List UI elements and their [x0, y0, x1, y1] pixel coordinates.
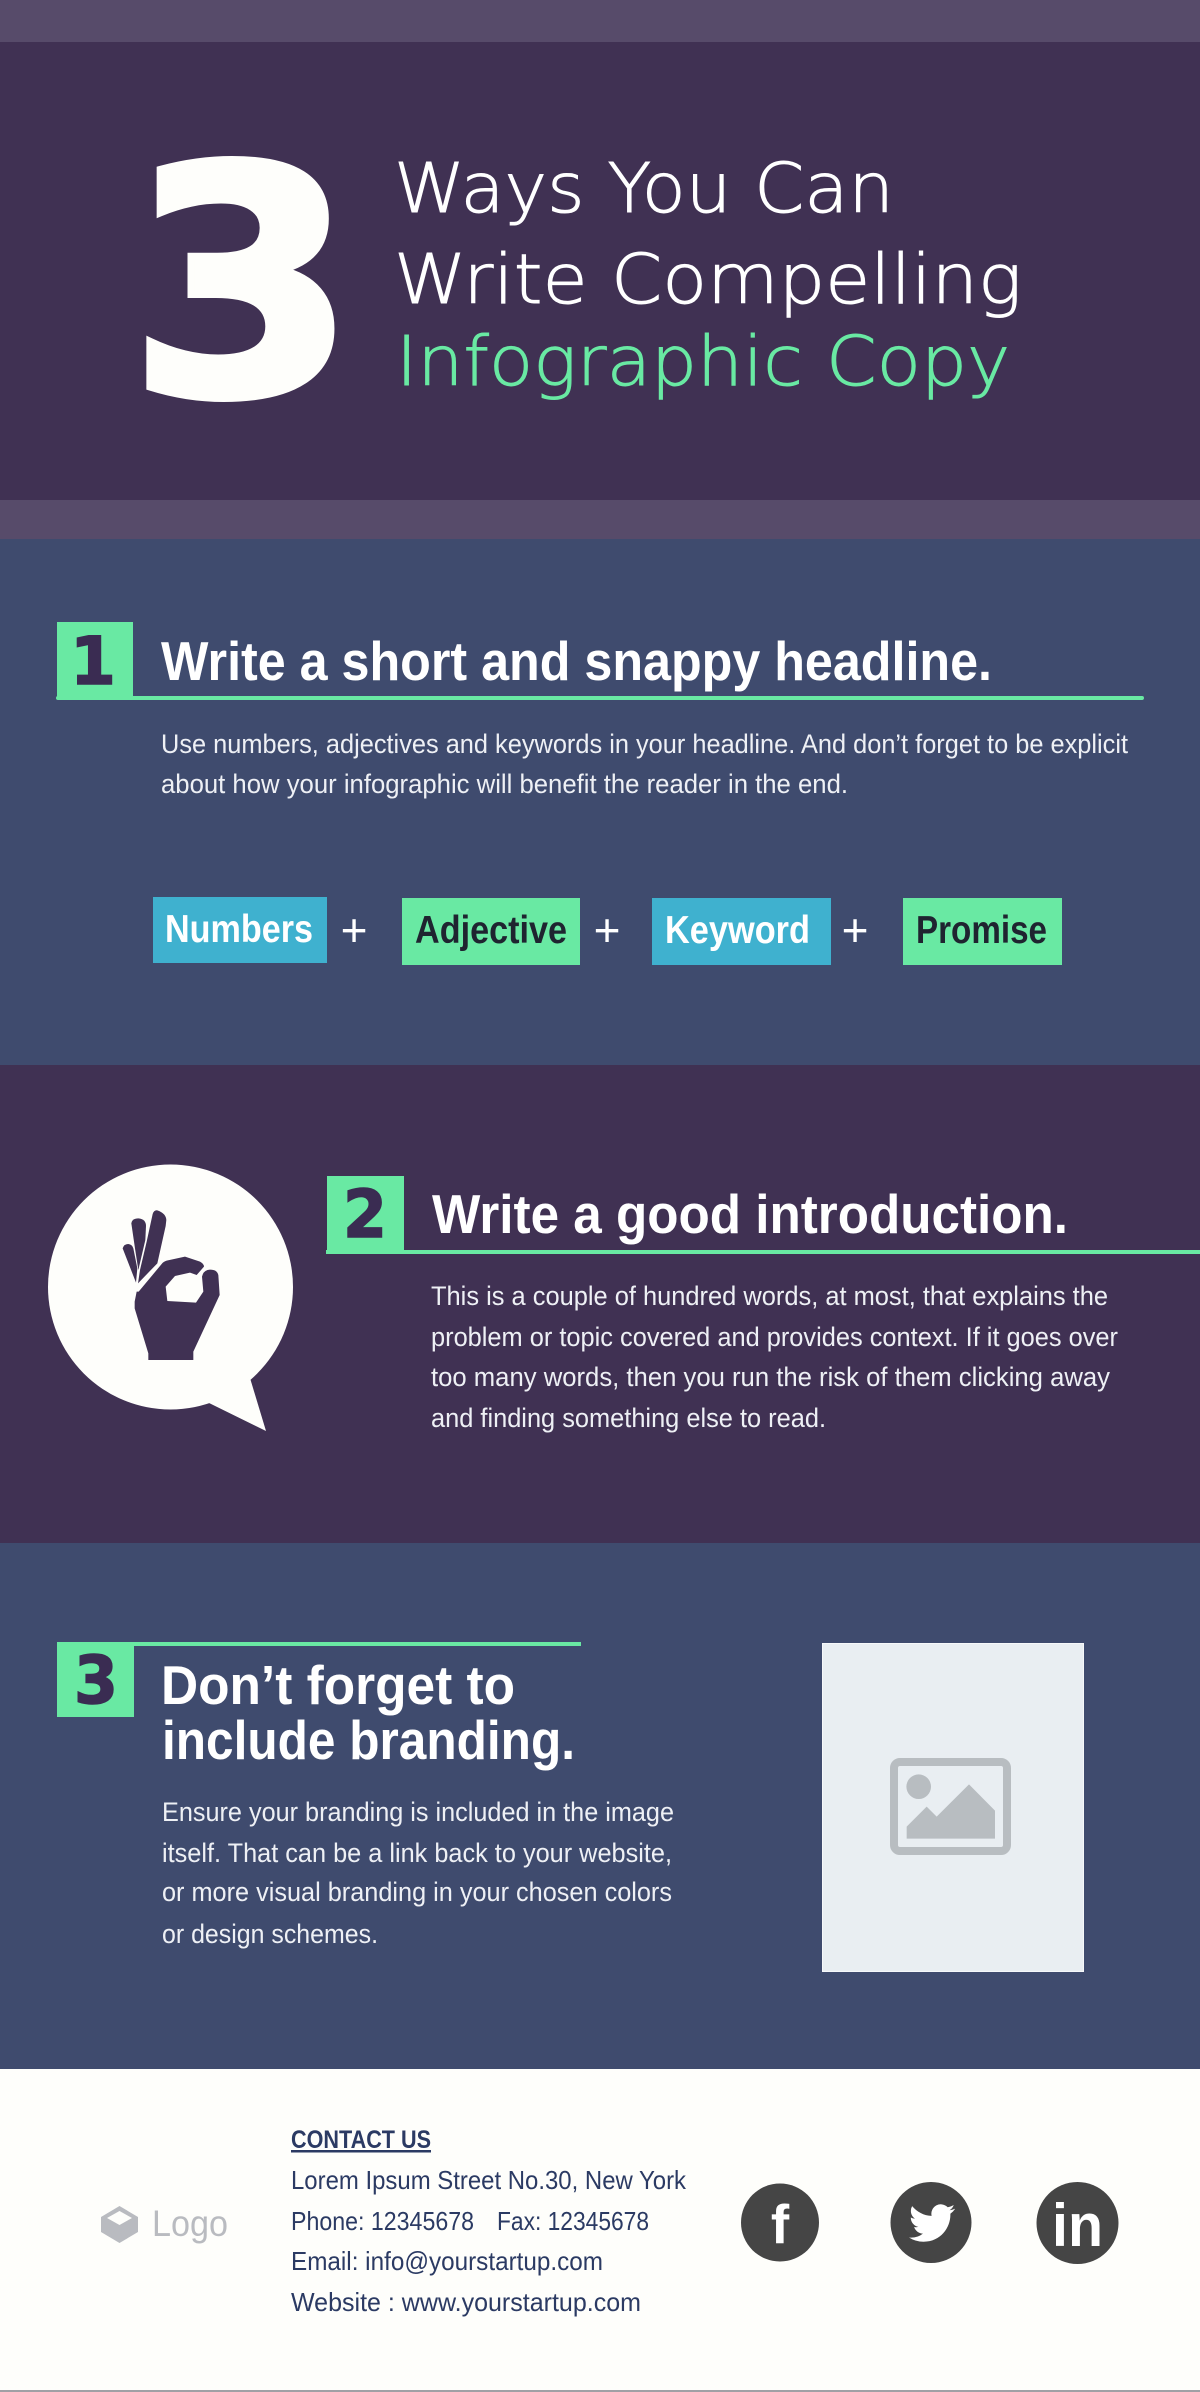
plus sign: +	[341, 904, 367, 956]
body text: too many words, then you run the risk of them clicking away	[431, 1362, 1110, 1392]
heading	[161, 1654, 575, 1771]
title: Ways You Can	[394, 149, 894, 229]
title: Write Compelling	[394, 240, 1022, 320]
chip: adjective: Adjective	[415, 909, 567, 952]
body text: or design schemes.	[162, 1919, 378, 1949]
number badge 2: 2	[343, 1176, 387, 1253]
contact details: Lorem Ipsum Street No.30, New York	[291, 2165, 687, 2195]
chip: numbers	[153, 897, 327, 963]
body text: This is a couple of hundred words, at most, that explains the	[431, 1281, 1108, 1311]
heading overline	[57, 1642, 581, 1646]
chip: keyword: Keyword	[665, 909, 810, 952]
heading: Write a short and snappy headline.	[161, 630, 992, 692]
icon: facebook: f	[771, 2193, 790, 2255]
body text	[161, 729, 1128, 799]
body text: Ensure your branding is included in the image	[162, 1797, 674, 1827]
plus sign: +	[594, 904, 620, 956]
body text	[162, 1797, 674, 1949]
contact details: Email: info@yourstartup.com	[291, 2246, 603, 2276]
heading: Write a good introduction.	[432, 1183, 1068, 1245]
panel: step 3	[0, 1543, 1200, 2069]
heading: include branding.	[162, 1709, 575, 1771]
body text: problem or topic covered and provides context. If it goes over	[431, 1322, 1118, 1352]
formula chips	[153, 897, 1062, 965]
icon: logo cube	[101, 2206, 138, 2243]
icon: picture	[894, 1762, 1007, 1851]
number badge 1	[57, 622, 133, 700]
contact details: Fax: 12345678	[497, 2206, 649, 2236]
heading underline	[326, 1250, 1200, 1254]
body text: or more visual branding in your chosen colors	[162, 1877, 672, 1907]
body text: and finding something else to read.	[431, 1403, 826, 1433]
number badge 1: 1	[70, 623, 116, 700]
icon: speech bubble with OK hand	[48, 1164, 293, 1431]
body text: itself. That can be a link back to your website,	[162, 1838, 672, 1868]
panel: header	[0, 0, 1200, 540]
icon: linkedin	[1036, 2182, 1118, 2264]
image placeholder	[822, 1644, 1084, 1972]
number badge 3	[57, 1642, 134, 1719]
number badge 2	[327, 1176, 404, 1253]
icon: twitter	[890, 2182, 972, 2263]
contact details	[291, 2126, 687, 2317]
contact details: Phone: 12345678	[291, 2206, 474, 2236]
body text: about how your infographic will benefit the reader in the end.	[161, 769, 848, 799]
heading: Don’t forget to	[161, 1654, 515, 1716]
big number 3: 3	[128, 101, 357, 469]
title	[394, 149, 1022, 402]
icon: linkedin: in	[1052, 2192, 1103, 2259]
contact heading: CONTACT US	[291, 2126, 431, 2154]
heading underline	[56, 696, 1144, 700]
plus sign: +	[842, 904, 868, 956]
logo	[101, 2203, 228, 2244]
panel: footer	[0, 2069, 1200, 2392]
chip: numbers: Numbers	[165, 908, 313, 951]
panel: step 1	[0, 539, 1200, 1065]
chip: adjective	[402, 898, 580, 965]
contact details: Website : www.yourstartup.com	[291, 2287, 641, 2317]
number badge 3: 3	[74, 1642, 118, 1719]
body text	[431, 1281, 1118, 1433]
body text: Use numbers, adjectives and keywords in your headline. And don’t forget to be explicit	[161, 729, 1128, 759]
icon: facebook	[741, 2184, 819, 2262]
logo: Logo	[152, 2203, 228, 2244]
title: Infographic Copy	[396, 322, 1010, 402]
chip: promise: Promise	[916, 909, 1047, 952]
chip: keyword	[652, 898, 831, 965]
panel: step 2	[0, 1065, 1200, 1543]
chip: promise	[903, 898, 1062, 965]
